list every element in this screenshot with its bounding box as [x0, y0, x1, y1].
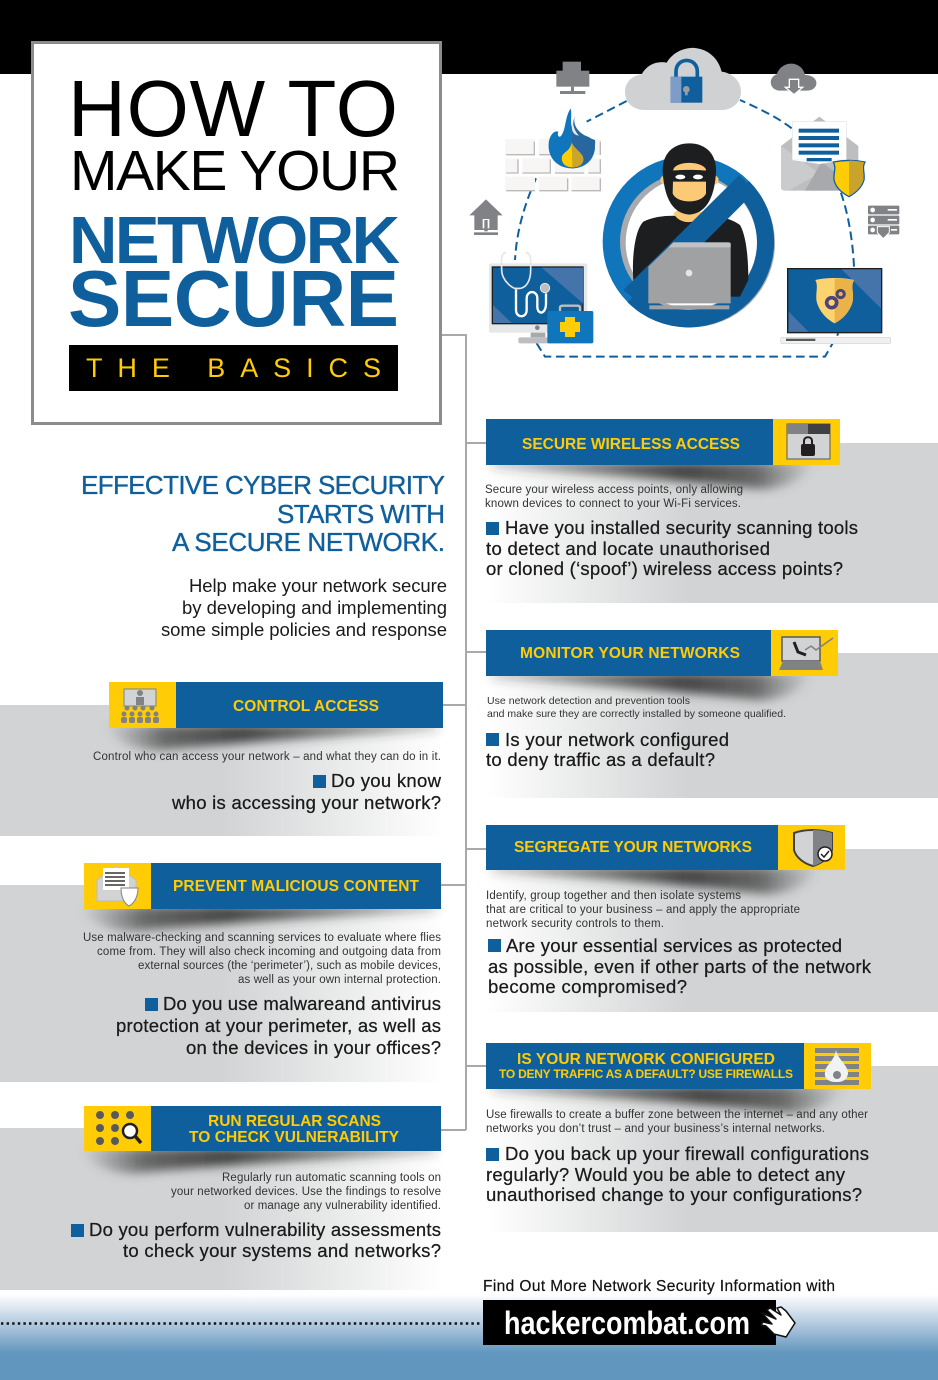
question: on the devices in your offices? [186, 1037, 441, 1058]
intro heading: A SECURE NETWORK. [172, 527, 445, 557]
question [116, 993, 441, 1058]
description: known devices to connect to your Wi-Fi services. [485, 498, 741, 510]
icon: scanning dots and magnifier [84, 1106, 151, 1151]
icon: laptop monitor [771, 630, 838, 676]
description: Regularly run automatic scanning tools on [222, 1172, 441, 1184]
header bar [486, 825, 778, 870]
question: regularly? Would you be able to detect any [486, 1164, 846, 1185]
header bar [486, 630, 771, 676]
laptop [648, 242, 731, 303]
footer gradient band [0, 1285, 938, 1380]
icon: monitor with stethoscope and medical case [489, 252, 593, 343]
header bar: PREVENT MALICIOUS CONTENT [173, 878, 420, 895]
description [83, 932, 441, 986]
question: who is accessing your network? [171, 792, 441, 813]
header bar [151, 1106, 441, 1151]
banner: the basics: THE BASICS [86, 353, 381, 383]
question: Have you installed security scanning tools [505, 517, 858, 538]
icon: cloud with padlock [625, 48, 741, 110]
panel: monitor your networks [486, 630, 838, 770]
question: Are your essential services as protected [506, 935, 842, 956]
panel: prevent malicious content [83, 863, 441, 1058]
question: protection at your perimeter, as well as [116, 1015, 441, 1036]
heading: make your: MAKE YOUR [70, 139, 400, 203]
dashed network ring [515, 100, 854, 357]
icon: browser lock [773, 419, 840, 465]
icon: server rack [868, 206, 899, 239]
description: come from. They will also check incoming and outgoing data from [97, 946, 441, 958]
intro text: Help make your network secure [189, 575, 447, 596]
question [71, 1219, 441, 1261]
description: Use network detection and prevention tools [487, 695, 690, 707]
description [486, 890, 800, 930]
question: unauthorised change to your configurations? [486, 1184, 862, 1205]
header bar: TO CHECK VULNERABILITY [189, 1129, 400, 1146]
question: to detect and locate unauthorised [486, 538, 770, 559]
description: and make sure they are correctly installed by someone qualified. [487, 708, 786, 720]
description [487, 695, 786, 720]
description: Control who can access your network – and what they can do in it. [93, 751, 441, 763]
banner: the basics [69, 345, 398, 391]
intro heading: STARTS WITH [277, 499, 445, 529]
heading: network: NETWORK [69, 203, 400, 278]
question: Do you perform vulnerability assessments [89, 1219, 441, 1240]
description: or manage any vulnerability identified. [244, 1200, 441, 1212]
panel: segregate your networks [486, 825, 872, 997]
panel: secure wireless access [485, 419, 858, 579]
panel: left gray backgrounds [0, 705, 443, 1290]
description: Use firewalls to create a buffer zone between the internet – and any other [486, 1109, 868, 1121]
header bar: TO DENY TRAFFIC AS A DEFAULT? USE FIREWALLS [499, 1067, 793, 1081]
intro text: some simple policies and response [161, 619, 447, 640]
description [486, 1109, 868, 1135]
header bar: MONITOR YOUR NETWORKS [520, 645, 740, 662]
description: Secure your wireless access points, only allowing [485, 484, 743, 496]
description: that are critical to your business – and apply the appropriate [486, 904, 800, 916]
title box [32, 42, 440, 424]
question [171, 770, 442, 813]
icon: home network [469, 199, 503, 235]
header bar: RUN REGULAR SCANS [208, 1113, 381, 1130]
description: your networked devices. Use the findings to resolve [171, 1186, 441, 1198]
icon: network printer [556, 62, 589, 94]
gold shield [833, 160, 865, 197]
description: as well as your own internal protection. [238, 974, 441, 986]
question [486, 517, 858, 579]
icon: shield check [778, 825, 845, 870]
connector lines [441, 335, 486, 1130]
question: become compromised? [488, 976, 687, 997]
header bar [176, 682, 443, 728]
icon: pointing hand [761, 1307, 795, 1337]
header bar [486, 419, 773, 465]
header shadows [80, 462, 846, 1173]
panel: use firewalls [486, 1043, 871, 1205]
question: Do you know [331, 770, 442, 791]
header bar [486, 1043, 804, 1089]
icon: brick firewall [505, 139, 601, 191]
header bar [151, 863, 441, 909]
question: Do you use malwareand antivirus [163, 993, 441, 1014]
panel: run regular scans [71, 1106, 441, 1261]
description: Use malware-checking and scanning services to evaluate where flies [83, 932, 441, 944]
footer dotted line [1, 1322, 481, 1325]
header bar: SECURE WIRELESS ACCESS [522, 436, 740, 453]
intro heading: EFFECTIVE CYBER SECURITY [81, 470, 445, 500]
header bar: CONTROL ACCESS [233, 698, 379, 715]
intro heading [81, 470, 445, 557]
description: network security controls to them. [486, 918, 664, 930]
description: Identify, group together and then isolate systems [486, 890, 741, 902]
icon: flame [549, 108, 595, 168]
header bar: IS YOUR NETWORK CONFIGURED [517, 1051, 775, 1068]
intro text [161, 575, 447, 640]
question: as possible, even if other parts of the network [488, 956, 872, 977]
question [486, 1143, 869, 1205]
heading: how to: HOW TO [68, 64, 398, 153]
icon: laptop with gear shield [781, 269, 891, 344]
icon: firewall [804, 1043, 871, 1089]
question: to deny traffic as a default? [486, 749, 715, 770]
footer link box: hackercombat.com [504, 1305, 750, 1341]
question: Is your network configured [505, 729, 729, 750]
icon: audience presentation [109, 682, 176, 728]
question [486, 729, 729, 770]
description: networks you don’t trust – and your business’s internal networks. [486, 1123, 825, 1135]
question [488, 935, 872, 997]
slash bar [623, 175, 755, 305]
description [171, 1172, 441, 1212]
hacker figure [633, 143, 748, 297]
icon: email with shield [781, 117, 865, 197]
intro text: by developing and implementing [182, 597, 447, 618]
description: external sources (the ‘perimeter’), such as mobile devices, [138, 960, 441, 972]
heading: secure: SECURE [68, 254, 399, 343]
panel: control access [93, 682, 443, 813]
illustration: network security hub [469, 48, 899, 357]
question: or cloned (‘spoof’) wireless access points? [486, 558, 843, 579]
panel: right gray backgrounds [486, 443, 938, 1232]
top black band [0, 0, 938, 74]
description [485, 484, 743, 510]
icon: cloud download [771, 64, 816, 95]
question: Do you back up your firewall configurations [505, 1143, 869, 1164]
question: to check your systems and networks? [123, 1240, 441, 1261]
header bar: SEGREGATE YOUR NETWORKS [514, 839, 752, 856]
icon: envelope shield [84, 863, 151, 909]
footer call to action: Find Out More Network Security Information with [483, 1278, 835, 1295]
icon: no hacker sign [603, 143, 775, 327]
